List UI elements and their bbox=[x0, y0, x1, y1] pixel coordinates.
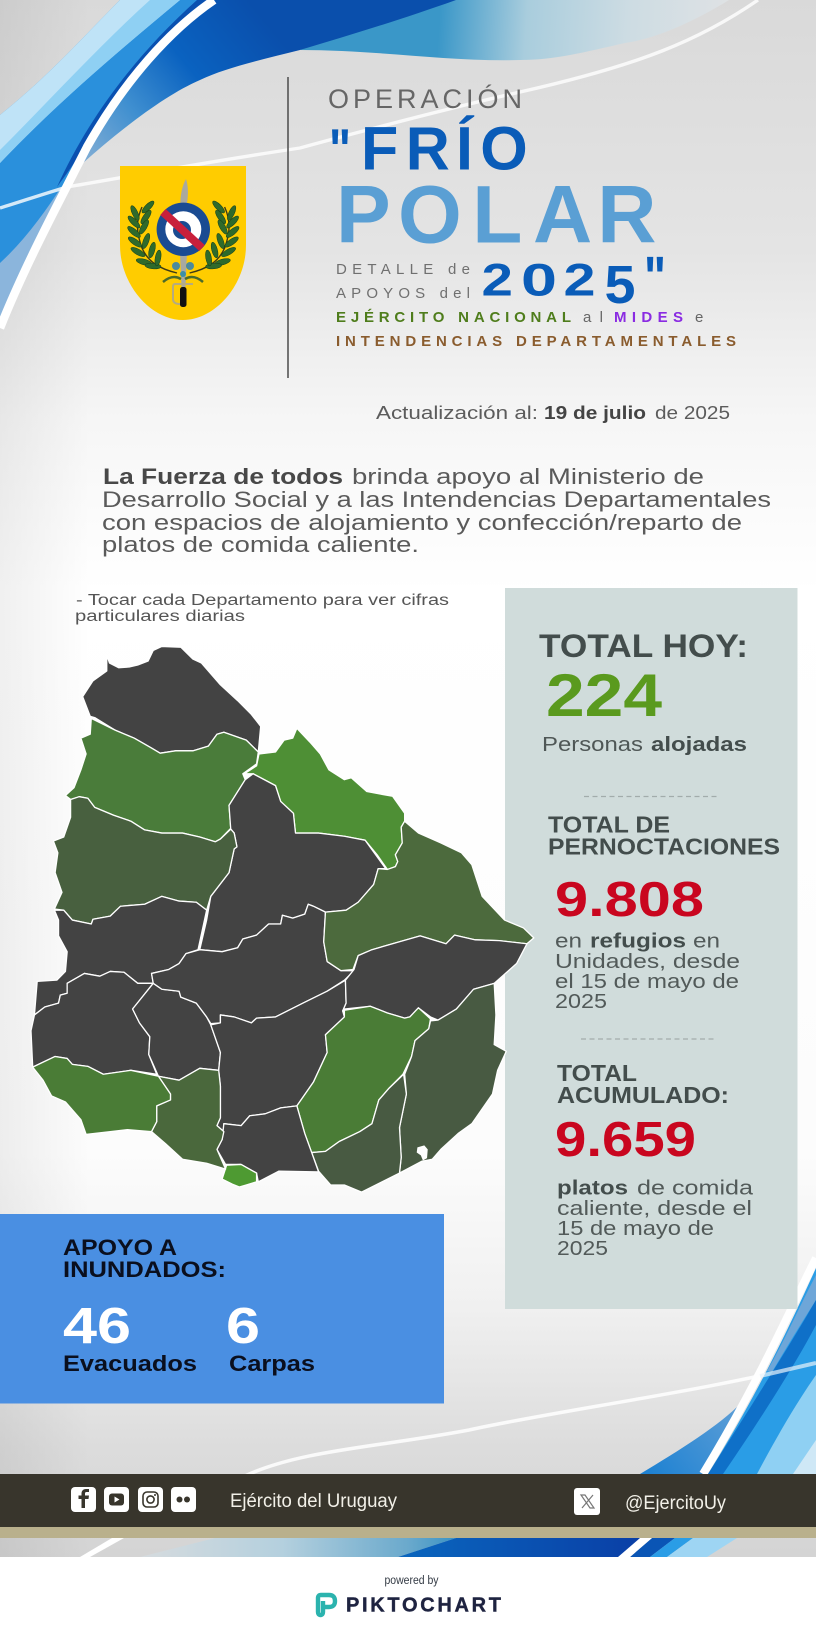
department: Río Negro bbox=[34, 896, 207, 1015]
subtitle: ejército nacional al mides e: MIDES bbox=[614, 309, 683, 326]
swoosh: top left blue waves bbox=[0, 0, 758, 328]
wordmark: PIKTOCHART bbox=[346, 1594, 501, 1616]
total acumulado: 9.659 bbox=[555, 1113, 696, 1167]
icon: youtube bbox=[104, 1487, 129, 1512]
total hoy: Personas bbox=[542, 733, 643, 756]
title: POLAR: POLAR bbox=[336, 170, 657, 261]
update date: 19 de julio bbox=[544, 403, 646, 423]
divider line bbox=[287, 77, 289, 378]
total pernoctaciones: en bbox=[555, 930, 582, 952]
department: Cerro Largo bbox=[324, 821, 534, 971]
title: 2025: 2 bbox=[564, 255, 596, 306]
stat: carpas bbox=[226, 1297, 315, 1376]
heading: APOYO A bbox=[63, 1235, 177, 1260]
subtitle: detalle de apoyos del: DETALLE de bbox=[336, 261, 470, 278]
swoosh: bottom right blue waves bbox=[80, 1258, 816, 1557]
title: 2025: " bbox=[644, 245, 666, 310]
department: Florida bbox=[211, 980, 346, 1132]
department: San José bbox=[152, 1068, 226, 1169]
icon: instagram bbox=[138, 1487, 163, 1512]
total pernoctaciones bbox=[548, 812, 780, 1013]
map note bbox=[75, 592, 449, 625]
total pernoctaciones: refugios bbox=[590, 930, 686, 952]
intro paragraph: platos de comida caliente. bbox=[102, 532, 419, 557]
map note: - Tocar cada Departamento para ver cifras bbox=[76, 592, 449, 609]
piktochart branding bbox=[318, 1575, 501, 1616]
total acumulado: TOTAL bbox=[557, 1060, 637, 1086]
stat: carpas: Carpas bbox=[229, 1351, 315, 1376]
total acumulado: 2025 bbox=[557, 1238, 608, 1260]
title: FRÍO: " bbox=[329, 117, 351, 182]
title: 2025 bbox=[482, 245, 666, 315]
intro paragraph: Desarrollo Social y a las Intendencias Departamentales bbox=[102, 487, 771, 512]
stat: carpas: 6 bbox=[226, 1297, 260, 1354]
heading: INUNDADOS: bbox=[63, 1257, 226, 1282]
total acumulado: platos bbox=[557, 1178, 628, 1200]
label: ejército del uruguay: Ejército del Uruguay bbox=[230, 1491, 397, 1512]
department: Soriano bbox=[31, 971, 157, 1074]
subtitle: ejército nacional al mides e: e bbox=[695, 309, 703, 326]
department: Treinta y Tres bbox=[343, 935, 527, 1020]
emblem: yellow shield bbox=[120, 166, 246, 320]
total acumulado: caliente, desde el bbox=[557, 1198, 752, 1220]
update date: Actualización al: bbox=[376, 403, 538, 423]
icon: facebook bbox=[71, 1487, 96, 1512]
panel: totals bbox=[505, 588, 798, 1309]
icon: flickr bbox=[171, 1487, 196, 1512]
heading bbox=[63, 1235, 226, 1282]
title: 2025: 0 bbox=[521, 255, 557, 306]
intro paragraph: La Fuerza de todos bbox=[103, 464, 343, 489]
title: FRÍO: FRÍO bbox=[361, 114, 528, 182]
department: Rocha bbox=[399, 983, 506, 1173]
department: Montevideo bbox=[222, 1164, 257, 1187]
stat: evacuados bbox=[63, 1297, 197, 1376]
total acumulado: ACUMULADO: bbox=[557, 1082, 729, 1108]
total pernoctaciones: PERNOCTACIONES bbox=[548, 834, 780, 860]
label: @EjercitoUy: @EjercitoUy bbox=[625, 1493, 726, 1514]
department: Colonia bbox=[33, 1056, 170, 1134]
update date: de 2025 bbox=[655, 403, 730, 423]
department: Durazno bbox=[152, 904, 354, 1024]
update date bbox=[376, 403, 730, 423]
subtitle: detalle de apoyos del: APOYOS del bbox=[336, 285, 470, 302]
total hoy: alojadas bbox=[651, 733, 747, 756]
title: 2025: 2 bbox=[482, 255, 513, 306]
department: Paysandú bbox=[53, 797, 237, 924]
total hoy: TOTAL HOY: bbox=[539, 628, 748, 664]
stat: evacuados: Evacuados bbox=[63, 1351, 197, 1376]
subtitle: ejército nacional al mides e bbox=[336, 309, 703, 326]
total pernoctaciones: 2025 bbox=[555, 991, 607, 1013]
department: Maldonado bbox=[312, 1074, 406, 1192]
total acumulado: de comida bbox=[637, 1178, 754, 1200]
department: Tacuarembó bbox=[200, 774, 386, 952]
lagoon in Rocha bbox=[417, 1145, 428, 1160]
total pernoctaciones: en bbox=[693, 930, 720, 952]
logo mark bbox=[318, 1595, 335, 1615]
department: Canelones bbox=[217, 1106, 319, 1182]
total acumulado: 15 de mayo de bbox=[557, 1218, 714, 1240]
intro paragraph bbox=[102, 464, 771, 557]
total pernoctaciones: 9.808 bbox=[555, 873, 704, 927]
total pernoctaciones: Unidades, desde bbox=[555, 951, 740, 973]
map of Uruguay by department bbox=[31, 646, 534, 1192]
title: OPERACIÓN: OPERACIÓN bbox=[328, 83, 522, 114]
total hoy bbox=[539, 628, 748, 756]
department: Artigas bbox=[83, 646, 261, 753]
total pernoctaciones: el 15 de mayo de bbox=[555, 971, 739, 993]
map note: particulares diarias bbox=[75, 608, 245, 625]
subtitle: intendencias departamentales: INTENDENCIAS DEPARTAMENTALES bbox=[336, 333, 736, 350]
subtitle: detalle de apoyos del bbox=[336, 261, 470, 302]
department: Lavalleja bbox=[297, 1006, 430, 1153]
department: Salto bbox=[65, 718, 258, 842]
intro paragraph: brinda apoyo al Ministerio de bbox=[352, 464, 704, 489]
icon: x bbox=[574, 1488, 600, 1515]
panel: apoyo a inundados bbox=[0, 1214, 444, 1404]
total hoy: 224 bbox=[546, 662, 663, 729]
department: Rivera bbox=[245, 728, 405, 869]
title: 2025: 5 bbox=[604, 255, 636, 315]
total pernoctaciones: TOTAL DE bbox=[548, 812, 670, 838]
intro paragraph: con espacios de alojamiento y confección/reparto de bbox=[102, 510, 742, 535]
stat: evacuados: 46 bbox=[63, 1297, 131, 1354]
footer bar bbox=[0, 1474, 816, 1538]
header bbox=[120, 77, 736, 378]
subtitle: ejército nacional al mides e: al bbox=[583, 309, 603, 326]
powered by: powered by bbox=[384, 1575, 439, 1587]
subtitle: ejército nacional al mides e: EJÉRCITO NACIONAL bbox=[336, 309, 571, 326]
total acumulado bbox=[555, 1060, 754, 1260]
department: Flores bbox=[133, 983, 220, 1080]
